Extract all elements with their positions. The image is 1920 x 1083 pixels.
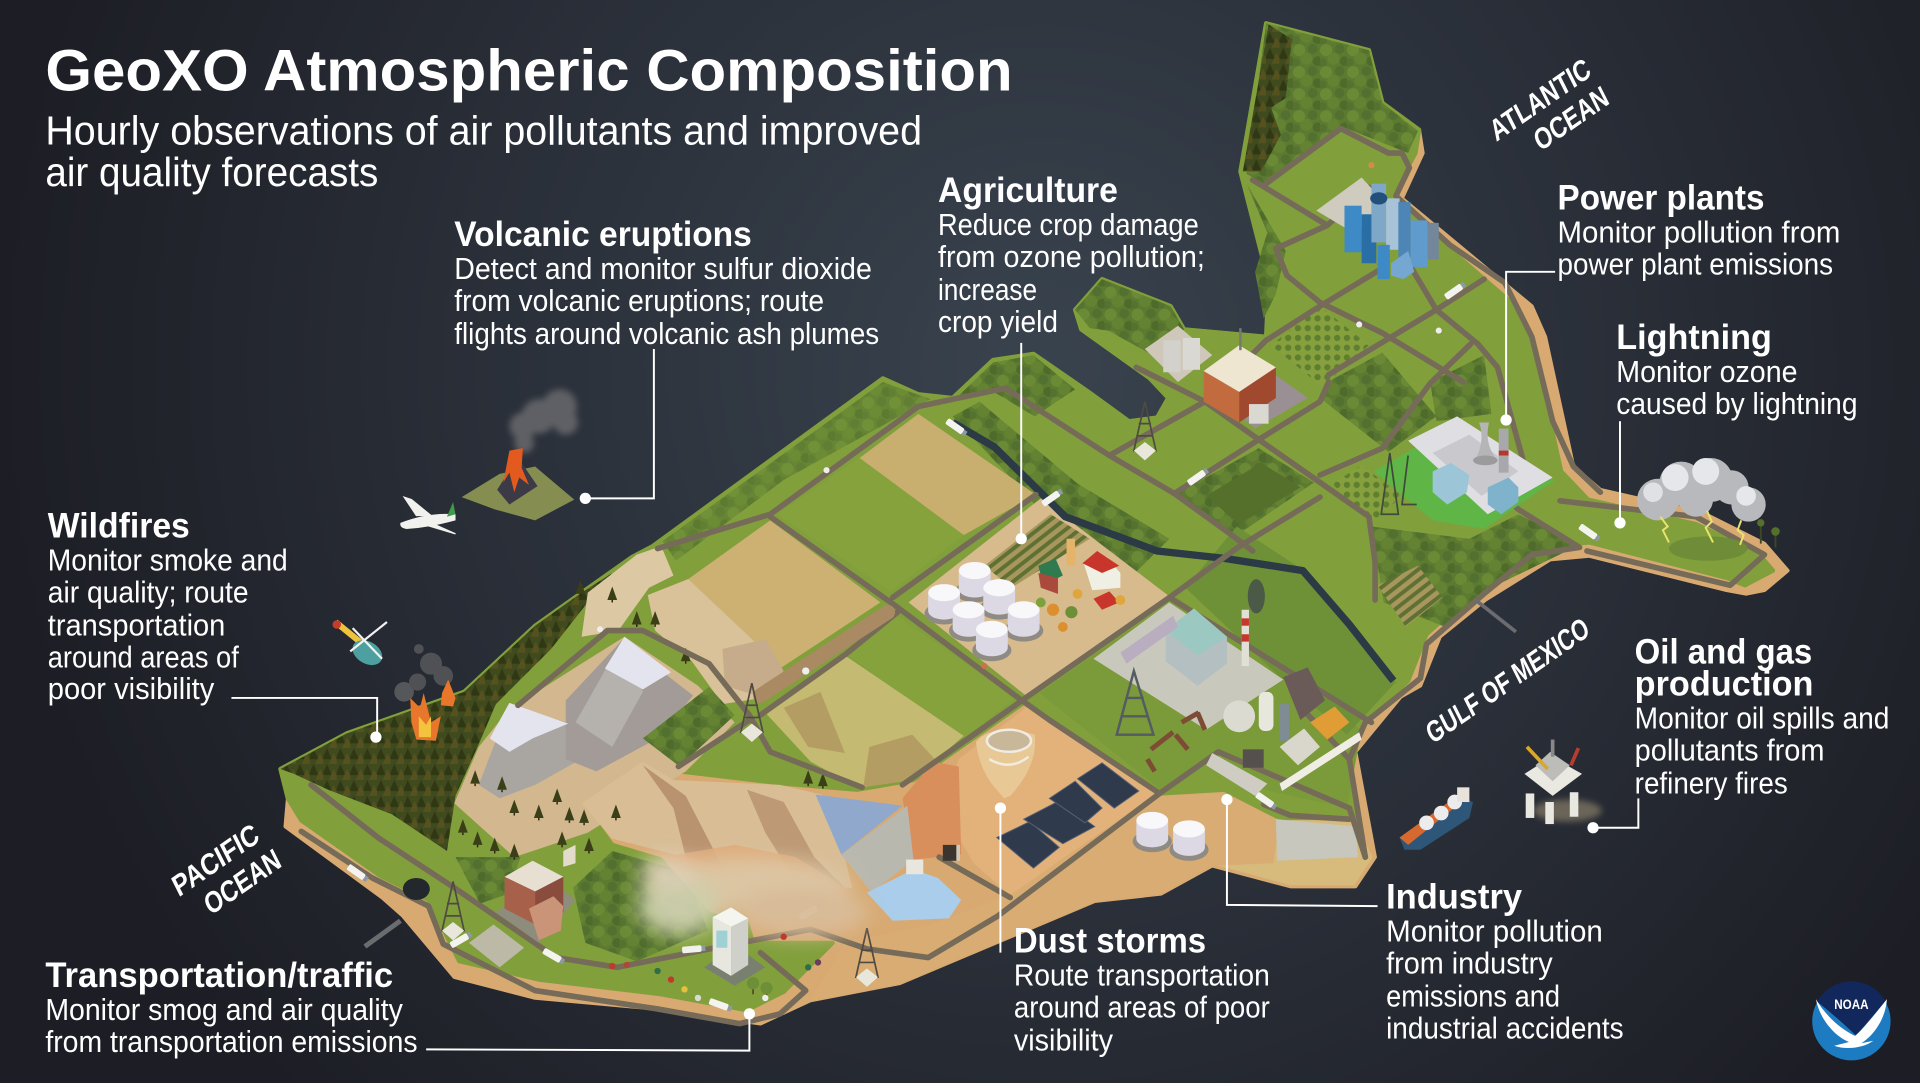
- oil rig: [1524, 740, 1602, 824]
- title: GeoXO Atmospheric Composition: [45, 39, 1013, 104]
- leader lines: [231, 272, 1638, 1051]
- forest: east cluster south: [1371, 514, 1580, 627]
- map: isometric land: [280, 23, 1788, 1024]
- text: volcanic eruptions: Detect and monitor sulfur dioxide: [454, 252, 872, 286]
- forest: north-east tip: [1247, 23, 1418, 184]
- leader: oil and gas: [1587, 798, 1638, 833]
- text: wildfires: around areas of: [48, 640, 239, 674]
- forest: strip by the river: [953, 402, 1169, 575]
- label: Gulf of Mexico: GULF OF MEXICO: [1421, 611, 1594, 751]
- label: Atlantic Ocean: ATLANTIC: [1485, 52, 1596, 148]
- forest: west shore east side: [1247, 184, 1286, 318]
- text: oil and gas production: [1635, 632, 1889, 800]
- text: power plants: [1558, 177, 1840, 281]
- dust cloud: [638, 855, 869, 937]
- traffic line: [609, 934, 821, 1001]
- text: power plants: power plant emissions: [1558, 247, 1833, 281]
- label: Pacific Ocean: PACIFIC: [167, 817, 264, 904]
- text: oil and gas production: Monitor oil spills and: [1635, 702, 1889, 736]
- transmission towers: [442, 402, 1156, 987]
- volcano smoke: [509, 389, 578, 453]
- text: oil and gas production: refinery fires: [1635, 766, 1788, 800]
- forest: dark pines west: [280, 573, 612, 851]
- text: lightning: caused by lightning: [1616, 387, 1858, 421]
- forest: central cluster: [1320, 353, 1436, 452]
- leader: agriculture: [1016, 343, 1027, 544]
- smoke plume at coast: [365, 921, 400, 947]
- text: wildfires: Wildfires: [48, 506, 190, 546]
- text: volcanic eruptions: Volcanic eruptions: [454, 214, 752, 254]
- pale tan coast south-east: [1206, 802, 1373, 885]
- leader: dust storms: [995, 803, 1006, 953]
- land base: sand coastline: [280, 23, 1788, 1024]
- solar panels: [997, 763, 1139, 868]
- text: agriculture: from ozone pollution;: [938, 240, 1205, 274]
- tunnel and substation: [403, 845, 956, 967]
- volcano: [462, 389, 578, 520]
- text: power plants: Monitor pollution from: [1558, 215, 1840, 249]
- vehicles: [346, 162, 1601, 1012]
- leader: wildfires: [231, 698, 382, 743]
- text: industry: from industry: [1386, 946, 1553, 980]
- pine trees on slopes: [458, 580, 828, 860]
- helicopter: [332, 620, 387, 670]
- highrise: [704, 907, 773, 999]
- leader: industry: [1221, 794, 1378, 906]
- subtitle: air quality forecasts: [45, 149, 378, 195]
- volcano cone: [497, 463, 538, 504]
- power plant: [1374, 416, 1555, 529]
- text: wildfires: transportation: [48, 608, 225, 642]
- factory block green: [1040, 598, 1362, 808]
- forest: lower-left woodland: [573, 851, 708, 961]
- forest: north coast trees: [662, 382, 931, 561]
- storage tanks: agriculture block: [924, 562, 1043, 661]
- text: dust storms: [1014, 921, 1270, 1058]
- fields: large field blocks: [582, 414, 1036, 787]
- text: agriculture: increase: [938, 273, 1037, 307]
- text: transportation/traffic: Monitor smog and air quality: [45, 993, 404, 1027]
- southern sand: [811, 793, 1280, 1000]
- dust field: [943, 707, 1157, 895]
- NOAA logo: [1812, 981, 1891, 1060]
- text: transportation/traffic: [45, 955, 418, 1059]
- text: oil and gas production: production: [1635, 663, 1813, 703]
- wildfire: [394, 644, 456, 741]
- ship: [1400, 787, 1473, 850]
- text: agriculture: crop yield: [938, 305, 1058, 339]
- storage tanks: beach: [1133, 812, 1209, 861]
- volcano island: [462, 467, 574, 520]
- text: agriculture: [938, 170, 1205, 339]
- mountains and foothills: [454, 637, 857, 931]
- leader: power plants: [1500, 272, 1555, 426]
- lava: [503, 448, 529, 492]
- text: wildfires: [48, 506, 288, 706]
- leader: lightning: [1614, 421, 1626, 528]
- storm cloud and lightning: [1637, 458, 1780, 561]
- text: industry: Monitor pollution: [1386, 915, 1603, 949]
- ship smoke in gulf: [1475, 600, 1516, 632]
- text: transportation/traffic: from transportation emissions: [45, 1025, 418, 1059]
- forest: mid block with dark clearing: [1177, 448, 1314, 539]
- farm buildings: [1036, 539, 1125, 632]
- forest: peninsula: [1075, 279, 1184, 358]
- forest: upper east cluster: [1430, 355, 1491, 421]
- text: wildfires: air quality; route: [48, 575, 249, 609]
- airplane: [400, 497, 456, 534]
- text: agriculture: Agriculture: [938, 170, 1118, 210]
- concrete pad: [1276, 819, 1358, 861]
- text: dust storms: Dust storms: [1014, 921, 1206, 961]
- roads: [301, 129, 1764, 1024]
- leader: transportation: [426, 1008, 755, 1051]
- forest: dark pines north-east: [1243, 24, 1292, 171]
- text: power plants: Power plants: [1558, 177, 1764, 217]
- subtitle: [45, 107, 922, 195]
- text: dust storms: Route transportation: [1014, 959, 1270, 993]
- text: volcanic eruptions: flights around volcanic ash plumes: [454, 317, 879, 351]
- subtitle: Hourly observations of air pollutants and improved: [45, 107, 922, 153]
- dust devil: [976, 730, 1035, 798]
- text: wildfires: Monitor smoke and: [48, 544, 288, 578]
- big green park: [1185, 527, 1396, 735]
- farm crop rows: [984, 514, 1090, 588]
- orchard fields: [1271, 306, 1369, 387]
- text: lightning: [1616, 317, 1858, 421]
- label: Atlantic Ocean: OCEAN: [1529, 80, 1614, 158]
- farm block: [909, 498, 1169, 697]
- factory: brick building and silos: [1145, 326, 1308, 429]
- text: industry: [1386, 877, 1624, 1045]
- text: lightning: Monitor ozone: [1616, 355, 1798, 389]
- text: lightning: Lightning: [1616, 317, 1772, 357]
- text: volcanic eruptions: [454, 214, 879, 351]
- NOAA logo: NOAA: [1834, 997, 1869, 1012]
- brick building: [496, 861, 576, 943]
- text: transportation/traffic: Transportation/traffic: [45, 955, 393, 995]
- label: Pacific Ocean: OCEAN: [199, 842, 286, 922]
- text: dust storms: around areas of poor: [1014, 991, 1270, 1025]
- text: oil and gas production: Oil and gas: [1635, 632, 1812, 672]
- leader: volcanic: [580, 349, 654, 504]
- text: industry: industrial accidents: [1386, 1011, 1624, 1045]
- text: industry: Industry: [1386, 877, 1522, 917]
- land: green farmland: [280, 23, 1773, 1010]
- river: [953, 422, 1393, 681]
- refinery: [1093, 579, 1362, 796]
- city skyline: [1316, 178, 1439, 279]
- dam and reservoir: [816, 762, 961, 921]
- text: volcanic eruptions: from volcanic eruptions; route: [454, 284, 824, 318]
- text: agriculture: Reduce crop damage: [938, 208, 1199, 242]
- text: industry: emissions and: [1386, 980, 1560, 1014]
- text: dust storms: visibility: [1014, 1024, 1114, 1058]
- text: wildfires: poor visibility: [48, 672, 215, 706]
- text: oil and gas production: pollutants from: [1635, 733, 1824, 767]
